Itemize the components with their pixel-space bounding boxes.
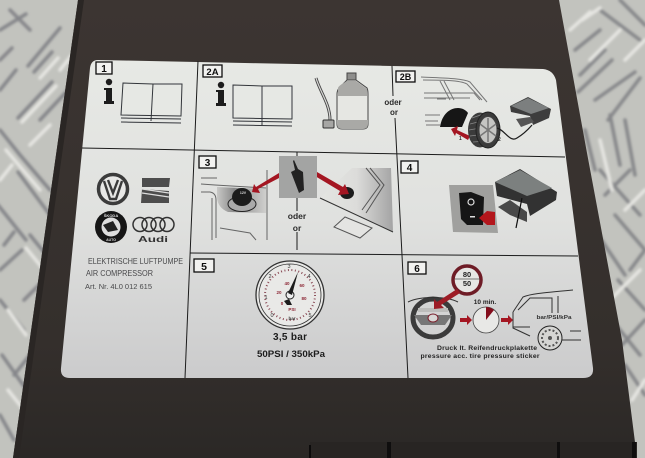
gauge dial: 0 [270, 313, 274, 319]
product description [85, 257, 183, 291]
icon: 12V socket: 12V [240, 191, 247, 195]
step number 4 [401, 161, 418, 174]
icon: open book [233, 85, 292, 126]
red arrow to valve [451, 126, 470, 140]
car rear side outline [421, 77, 487, 125]
gauge dial: 1 [264, 295, 268, 301]
steering wheel [408, 298, 458, 337]
logo: Skoda [95, 211, 127, 243]
red arrows to sockets [252, 172, 349, 195]
gauge dial: 20 [276, 290, 282, 295]
product description: Art. Nr. 4L0 012 615 [85, 282, 152, 291]
lid slots at bottom edge [309, 442, 637, 458]
step number 2B [396, 71, 415, 82]
gauge dial: bar [288, 316, 296, 321]
shaded socket surround [217, 187, 266, 213]
gauge dial [256, 261, 324, 329]
panel 5: pressure gauge [194, 259, 326, 360]
wheel arch [440, 108, 468, 127]
rocker switch [459, 192, 484, 225]
gauge dial: 60 [299, 283, 305, 288]
pressure values: 50PSI / 350kPa [257, 349, 326, 360]
step number 2B: 2B [400, 72, 412, 82]
panel 6: drive and recheck [408, 262, 581, 360]
icon: open book [121, 83, 182, 123]
gauge dial: 40 [284, 281, 290, 286]
or separator text: oder [384, 98, 402, 107]
compressor hose [497, 125, 532, 139]
icon: 12V socket [228, 188, 256, 212]
plug in grey box [279, 156, 317, 198]
panel 1: read manual [96, 62, 182, 123]
product description: ELEKTRISCHE LUFTPUMPE [88, 257, 183, 266]
logo: Skoda: AUTO [106, 238, 116, 242]
red arrows [460, 315, 513, 325]
icon: information i [216, 82, 226, 106]
pressure sticker note: Druck lt. Reifendruckplakette [437, 345, 537, 352]
step number 2A [203, 65, 222, 78]
pressure values [257, 332, 326, 360]
step number 1: 1 [101, 64, 107, 75]
gauge dial: 5 [308, 313, 312, 319]
speed limit sign: 80 [463, 270, 471, 279]
panel 2A: read manual, sealant bottle [203, 65, 402, 129]
gauge dial: 80 [301, 296, 307, 301]
red arrow on switch [479, 211, 495, 225]
or separator text [384, 98, 402, 117]
pressure sticker note [420, 345, 540, 360]
panel 2B: connect hose to tyre valve [396, 71, 551, 148]
red arrow to wheel [434, 289, 460, 309]
position labels [459, 136, 501, 143]
step number 6: 6 [414, 264, 420, 275]
gauge dial: 4 [307, 274, 311, 280]
icon: compressor [495, 169, 557, 228]
logo: Skoda: ŠKODA [104, 213, 118, 218]
position labels: 1 [459, 136, 462, 142]
logo: Volkswagen [98, 174, 128, 204]
step number 5: 5 [201, 261, 207, 273]
icon: filler hose [316, 78, 334, 128]
logo: SEAT [141, 178, 170, 203]
step number 3: 3 [205, 158, 211, 169]
product description: AIR COMPRESSOR [86, 269, 153, 278]
clock [473, 307, 499, 333]
tyre with rim [468, 112, 500, 148]
step number 3 [199, 156, 216, 169]
icon: sealant bottle [337, 73, 368, 129]
switch grey box [449, 185, 498, 233]
pressure sticker note: pressure acc. tire pressure sticker [420, 353, 540, 360]
right-side shaded interior [320, 168, 393, 238]
logo: Audi: Audi [138, 234, 168, 244]
position labels: 2 [498, 137, 501, 143]
gauge dial: PSI [288, 307, 296, 312]
pressure units label: bar/PSI/kPa [536, 315, 573, 321]
step number 2A: 2A [206, 67, 219, 78]
dashboard outline [201, 170, 267, 240]
or separator text [288, 211, 307, 233]
car rear [513, 290, 581, 340]
speed limit sign: 50 [463, 279, 471, 288]
step number 4: 4 [407, 163, 413, 174]
icon: compressor [510, 97, 551, 127]
panel 4: switch on compressor [401, 161, 557, 233]
instruction sticker [61, 60, 593, 378]
or separator text: oder [288, 211, 307, 221]
gauge dial: 2 [268, 274, 272, 280]
or separator text: or [293, 223, 302, 233]
time label: 10 min. [474, 299, 496, 306]
panel 3: plug into 12V socket [199, 156, 393, 240]
or separator text: or [390, 108, 398, 117]
speed limit sign [453, 266, 481, 294]
step number 6 [408, 262, 426, 275]
gauge dial: 0 [281, 301, 284, 306]
logo column [85, 174, 183, 291]
pressure values: 3,5 bar [273, 332, 307, 343]
car wheel [538, 326, 562, 350]
grid lines [82, 61, 578, 378]
icon: information i [104, 79, 114, 104]
gauge dial: 3 [287, 264, 291, 270]
